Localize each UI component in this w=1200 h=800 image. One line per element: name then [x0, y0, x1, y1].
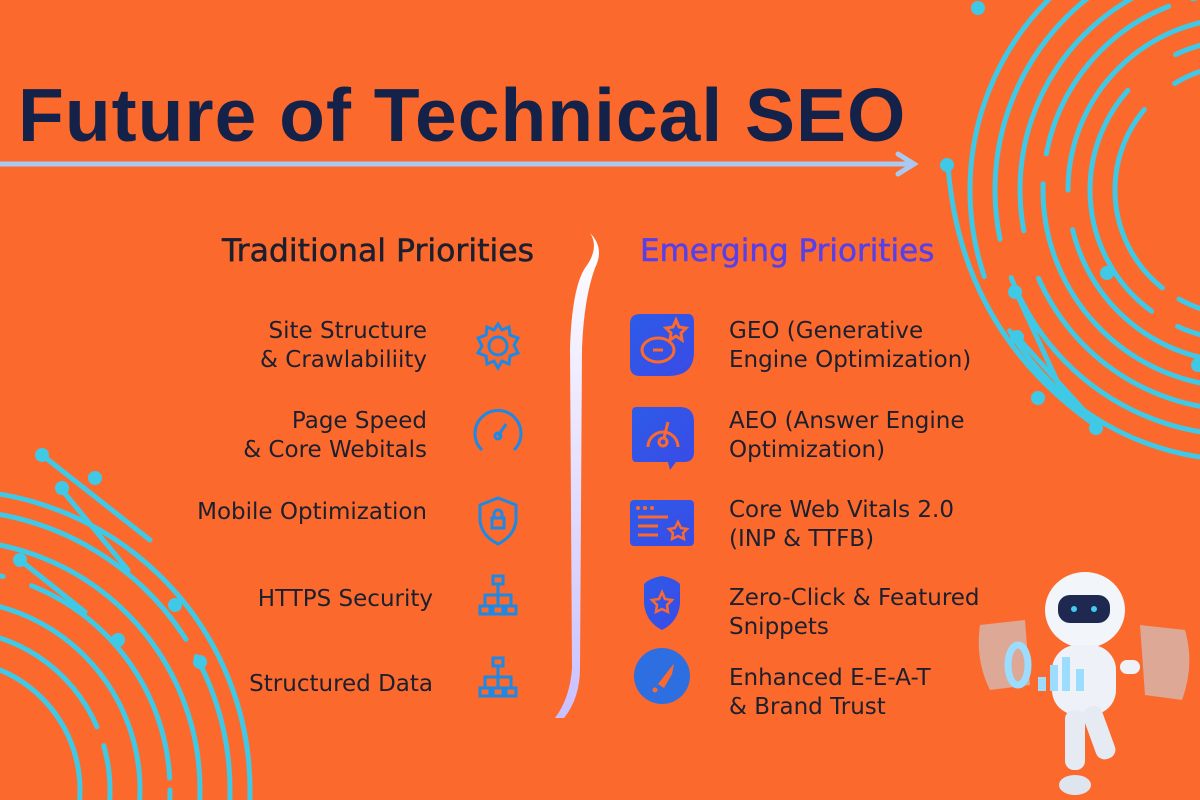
text: Snippets — [729, 614, 829, 640]
illustration: robot — [978, 572, 1190, 795]
text: Core Web Vitals 2.0 — [729, 497, 954, 523]
text: Zero-Click & Featured — [729, 585, 980, 611]
text: (INP & TTFB) — [729, 526, 874, 552]
text: AEO (Answer Engine — [729, 408, 965, 434]
text block: emerging list — [729, 318, 971, 373]
text: HTTPS Security — [258, 586, 433, 612]
text block: traditional list: & Crawlabiliity — [260, 347, 427, 373]
icons: traditional — [474, 321, 522, 698]
heading: emerging: Emerging Priorities — [640, 233, 934, 269]
text: & Core Webitals — [243, 437, 427, 463]
text block: emerging list: GEO (Generative — [729, 318, 923, 344]
text block: traditional list — [260, 318, 427, 373]
text: & Brand Trust — [729, 694, 886, 720]
heading: traditional: Traditional Priorities — [222, 233, 534, 269]
text: Enhanced E-E-A-T — [729, 665, 931, 691]
text block: emerging list: Engine Optimization) — [729, 347, 971, 373]
text block: traditional list: Site Structure — [269, 318, 427, 344]
text: Page Speed — [292, 408, 427, 434]
text: Mobile Optimization — [197, 499, 427, 525]
title: Future of Technical SEO — [18, 73, 906, 157]
icons: emerging — [630, 314, 694, 704]
divider vertical — [555, 233, 599, 718]
arrow: title underline — [0, 152, 919, 176]
text: Structured Data — [249, 671, 433, 697]
text: Optimization) — [729, 437, 885, 463]
